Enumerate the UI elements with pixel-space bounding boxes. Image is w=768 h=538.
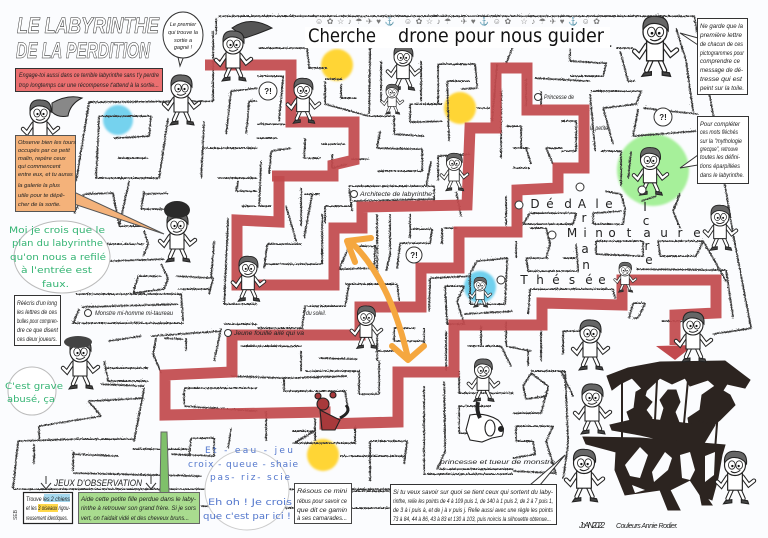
callout: orange instructions: occupés par ce petit: [18, 148, 70, 154]
box: mythology crossword: dans le labyrinthe.: [700, 172, 744, 179]
word: Minotaure: a: [643, 226, 651, 240]
word: Ariane: [581, 211, 590, 272]
speech bubble: abusé: C'est grave: [5, 382, 64, 392]
box: mythology crossword: toutes les défini-: [700, 154, 740, 161]
speech bubble: abusé: [5, 367, 64, 415]
speech bubble: green plan: Moi je crois que le: [9, 226, 106, 236]
word: Ariane: r: [582, 211, 587, 225]
callout: orange instructions: la galerie la plus: [18, 183, 60, 189]
word: Dédale: [530, 197, 613, 211]
word: Dédale: D: [530, 197, 540, 211]
character: kid on maze left: [63, 336, 98, 389]
maze label: jeune: du soleil.: [306, 310, 326, 317]
red dragon figure: [315, 392, 348, 430]
box: pictograms: de chacun de ces: [700, 41, 743, 48]
callout: read bubbles: Réécris d'un long: [17, 300, 57, 307]
highlight circles: [103, 49, 689, 471]
heading: cherche drone: Cherche: [308, 25, 376, 47]
word: Dédale: e: [605, 197, 613, 211]
heading: jeux d'observation: JEUX D'OBSERVATION: [53, 478, 142, 488]
speech bubble: green plan: qu'on nous a refilé: [10, 252, 107, 263]
orange double arrow: [347, 238, 424, 360]
speech bubble: green plan: à l'entrée est: [21, 265, 93, 276]
callout: orange instructions: entre eux, et tu auras: [18, 172, 73, 178]
box: rebus note: à ses camarades...: [297, 515, 347, 522]
black silhouette: raft with sail: [583, 361, 750, 510]
box: rebus note: [294, 484, 352, 524]
character: runner top: [164, 75, 199, 125]
text: blue rebus bubble: pas- riz- scie: [210, 473, 290, 483]
word: Dédale: l: [595, 197, 599, 211]
text: blue rebus bubble: croix - queue - shaie: [188, 460, 298, 470]
word: Minotaure: t: [627, 226, 632, 240]
callout: read bubbles: dre ce que disent: [17, 327, 58, 334]
raft cut-outs: [625, 447, 715, 493]
word: Minotaure: M: [567, 226, 577, 240]
box: connect the dots: [390, 455, 565, 524]
credit: signature: Couleurs Annie Rodier.: [616, 523, 678, 530]
speech bubble: green plan: faux.: [42, 280, 69, 290]
crossword: mythology words: [519, 197, 701, 287]
callout: orange instructions: [16, 136, 164, 234]
box: find dogs and birds: reusement identiques.: [26, 515, 68, 522]
question bubbles: ?!: [264, 87, 272, 96]
callout: orange instructions: malin, repère ceux: [18, 156, 67, 162]
box: mythology crossword: [680, 116, 748, 184]
word: Dédale: A: [578, 197, 587, 211]
word: Thésée: [519, 273, 606, 287]
callout: green lost girl: [78, 432, 200, 524]
callout: read bubbles: bulles pour compren-: [17, 318, 58, 325]
character: bottom left of maze runner: [575, 384, 610, 434]
word: Minotaure: i: [583, 226, 587, 240]
title: LE LABYRINTHE: [17, 13, 160, 38]
credit: signature: JoAN 2022: [578, 521, 606, 530]
maze label: monstre: Monstre mi-homme mi-taureau: [95, 310, 174, 317]
character: hero on banner: [216, 22, 272, 81]
text: blue rebus bubble: [188, 446, 298, 530]
character: small top: [615, 262, 636, 292]
word: Thésée: T: [519, 273, 528, 287]
word: Icare: r: [645, 239, 650, 253]
callout: read bubbles: les lettres de ces: [17, 309, 57, 316]
word: Minotaure: o: [608, 226, 616, 240]
maze label: princesse 2: la petite: [590, 125, 608, 132]
callout: orange instructions: utile pour te dépê-: [18, 193, 65, 199]
character: kid with cap: [441, 153, 468, 191]
red solution path: [165, 65, 716, 424]
callout: green lost girl: Aide cette petite fille perdue dans le laby-: [80, 496, 196, 503]
box: mythology crossword: Pour compléter: [700, 121, 741, 128]
heading: cherche drone: ☺✿☆♪☂✈♥⚓ ☺✿☆♪☂ ✈♥⚓☺✿ ☆♪☂✈♥⚓☺✿: [315, 16, 600, 26]
poles: [622, 380, 720, 450]
character: boy with dark hair: [160, 201, 195, 262]
word: Ariane: n: [582, 258, 590, 272]
heading: cherche drone: [305, 16, 610, 48]
maze label: princesse 2: Princesse de: [544, 94, 574, 101]
question bubbles: [259, 82, 672, 263]
word: Minotaure: e: [693, 226, 701, 240]
maze label: architecte: Architecte de labyrinthe: [359, 191, 433, 198]
box: rebus note: Résous ce mini: [297, 488, 348, 495]
text: blue rebus bubble: Et - eau - jeu: [205, 446, 293, 456]
word: Minotaure: r: [678, 226, 683, 240]
word: Dédale: d: [564, 197, 572, 211]
maze label: princesse 2: [534, 94, 608, 132]
speech bubble: green plan: plan du labyrinthe: [12, 239, 103, 249]
question bubbles: ?!: [410, 251, 418, 260]
character: blue ball character: [470, 277, 491, 307]
question bubbles: ?!: [659, 113, 667, 122]
character: helmet kid: [573, 320, 608, 370]
credit: signature: [13, 509, 678, 530]
character: kid in red top: [288, 78, 319, 123]
maze label: jeune: [224, 310, 326, 337]
word: Minotaure: u: [660, 226, 668, 240]
character: kid bottom right: [717, 451, 754, 504]
text: blue rebus bubble: Eh oh ! Je crois: [208, 498, 292, 508]
word: Thésée: s: [569, 273, 575, 287]
credit: signature: SEB: [13, 509, 19, 520]
box: find dogs and birds: Trouve les 2 chiens: [26, 496, 70, 503]
title: [16, 13, 160, 63]
box: mythology crossword: sur la "mythologie: [700, 138, 742, 145]
character: kid right: [705, 205, 736, 250]
box: pictograms: peint sur la toile.: [699, 85, 744, 92]
crossbar: [610, 418, 705, 450]
maze label: jeune: Jeune fouillé ailé qui va: [233, 330, 305, 337]
box: mythology crossword: tions éparpillées: [700, 163, 740, 170]
callout: green lost girl: vert, on t'aidait vidé et des cheveux bruns...: [81, 515, 189, 522]
character: green-circle figure: [634, 148, 667, 195]
word: Icare: I: [643, 200, 647, 214]
word: Icare: [643, 200, 653, 267]
character: red-path kid: [676, 312, 711, 362]
box: connect the dots: 73 à 84, 44 à 86, 43 à 83 et 130 à 103, puis noircis la silhouette obtenue...: [393, 516, 551, 523]
box: mythology crossword: grecque", retrouve: [700, 146, 738, 153]
speech bubble: green plan: [9, 221, 110, 293]
box: pictograms: message de dé-: [700, 67, 743, 74]
box: find dogs and birds: et les 3 oiseaux rigou-: [26, 505, 70, 512]
banner: red intro: [16, 68, 162, 92]
heading: jeux d'observation: [41, 476, 156, 489]
word: Thésée: é: [585, 273, 593, 287]
character: princess: [469, 359, 498, 401]
word: Thésée: e: [598, 273, 606, 287]
box: pictograms: pictogrammes pour: [699, 50, 745, 57]
box: connect the dots: rinthe, relie les points de 4 à 109 puis 1, de 140 à 1 puis 2, de 2 à 7 puis 1,: [393, 498, 553, 505]
box: find dogs and birds: [24, 492, 72, 524]
maze label: princesse: princesse et tueur de monstre: [439, 459, 556, 466]
character: lying kid centre: [382, 84, 403, 114]
box: pictograms: tresse qui est: [700, 76, 742, 83]
speech bubble: first out wins: Le premier: [170, 22, 197, 28]
speech bubble: first out wins: sortie a: [174, 38, 192, 44]
maze number markers: [497, 183, 646, 284]
word: Ariane: a: [581, 242, 589, 256]
character: girl top left: [23, 97, 82, 150]
box: pictograms: Ne garde que la: [700, 23, 744, 30]
callout: orange instructions: qui commencent: [18, 164, 61, 170]
box: rebus note: rébus pour savoir ce: [297, 498, 347, 505]
box: pictograms: comprendre ce: [700, 58, 741, 65]
character: top centre: [388, 45, 419, 90]
character: girl with ponytail: [566, 449, 603, 502]
word: Thésée: é: [552, 273, 560, 287]
speech bubble: abusé: abusé, ça: [7, 394, 55, 405]
box: mythology crossword: ces mots fléchés: [700, 129, 738, 136]
dog sniffing: [466, 402, 504, 442]
word: Minotaure: [567, 226, 701, 240]
word: Icare: c: [643, 214, 649, 228]
speech bubble: first out wins: [163, 12, 203, 66]
box: pictograms: [680, 18, 748, 94]
box: rebus note: que dit ce gamin: [297, 507, 348, 514]
speech bubble: first out wins: gagné !: [174, 45, 193, 51]
title: DE LA PERDITION: [16, 38, 151, 63]
canopy: [607, 361, 750, 392]
word: Dédale: é: [546, 197, 554, 211]
callout: orange instructions: Observe bien les tours: [18, 140, 76, 146]
hull: [583, 437, 725, 510]
sail shapes: [627, 385, 652, 432]
character: kid with spiky hair: [352, 306, 381, 348]
character: red figure: [233, 256, 264, 301]
banner: red intro: trop longtemps car une récompense t'attend à la sortie...: [19, 82, 159, 89]
character: guide top right: [635, 16, 677, 76]
speech bubble: first out wins: qui trouve la: [168, 30, 198, 36]
box: connect the dots: de 3 à i puis à, et de j à v puis j. Relie aussi avec une règle les points: [393, 507, 553, 514]
callout: read bubbles: [14, 296, 60, 346]
text: blue rebus bubble: que c'est par ici !: [203, 512, 291, 522]
banner: red intro: Engage-toi aussi dans ce terrible labyrinthe sans t'y perdre: [19, 72, 159, 79]
word: Minotaure: n: [595, 226, 603, 240]
callout: read bubbles: ces deux joueurs.: [17, 336, 57, 343]
word: Icare: e: [645, 253, 653, 267]
callout: green lost girl: rinthe à retrouver son grand frère. Si je sors: [81, 505, 196, 512]
heading: cherche drone: drone pour nous guider: [398, 25, 604, 47]
callout: orange instructions: cher de la sortie.: [18, 202, 61, 208]
box: pictograms: première lettre: [699, 32, 743, 39]
box: connect the dots: Si tu veux savoir sur quoi se tient ceux qui sortent du laby-: [393, 489, 553, 496]
word: Thésée: h: [536, 273, 544, 287]
